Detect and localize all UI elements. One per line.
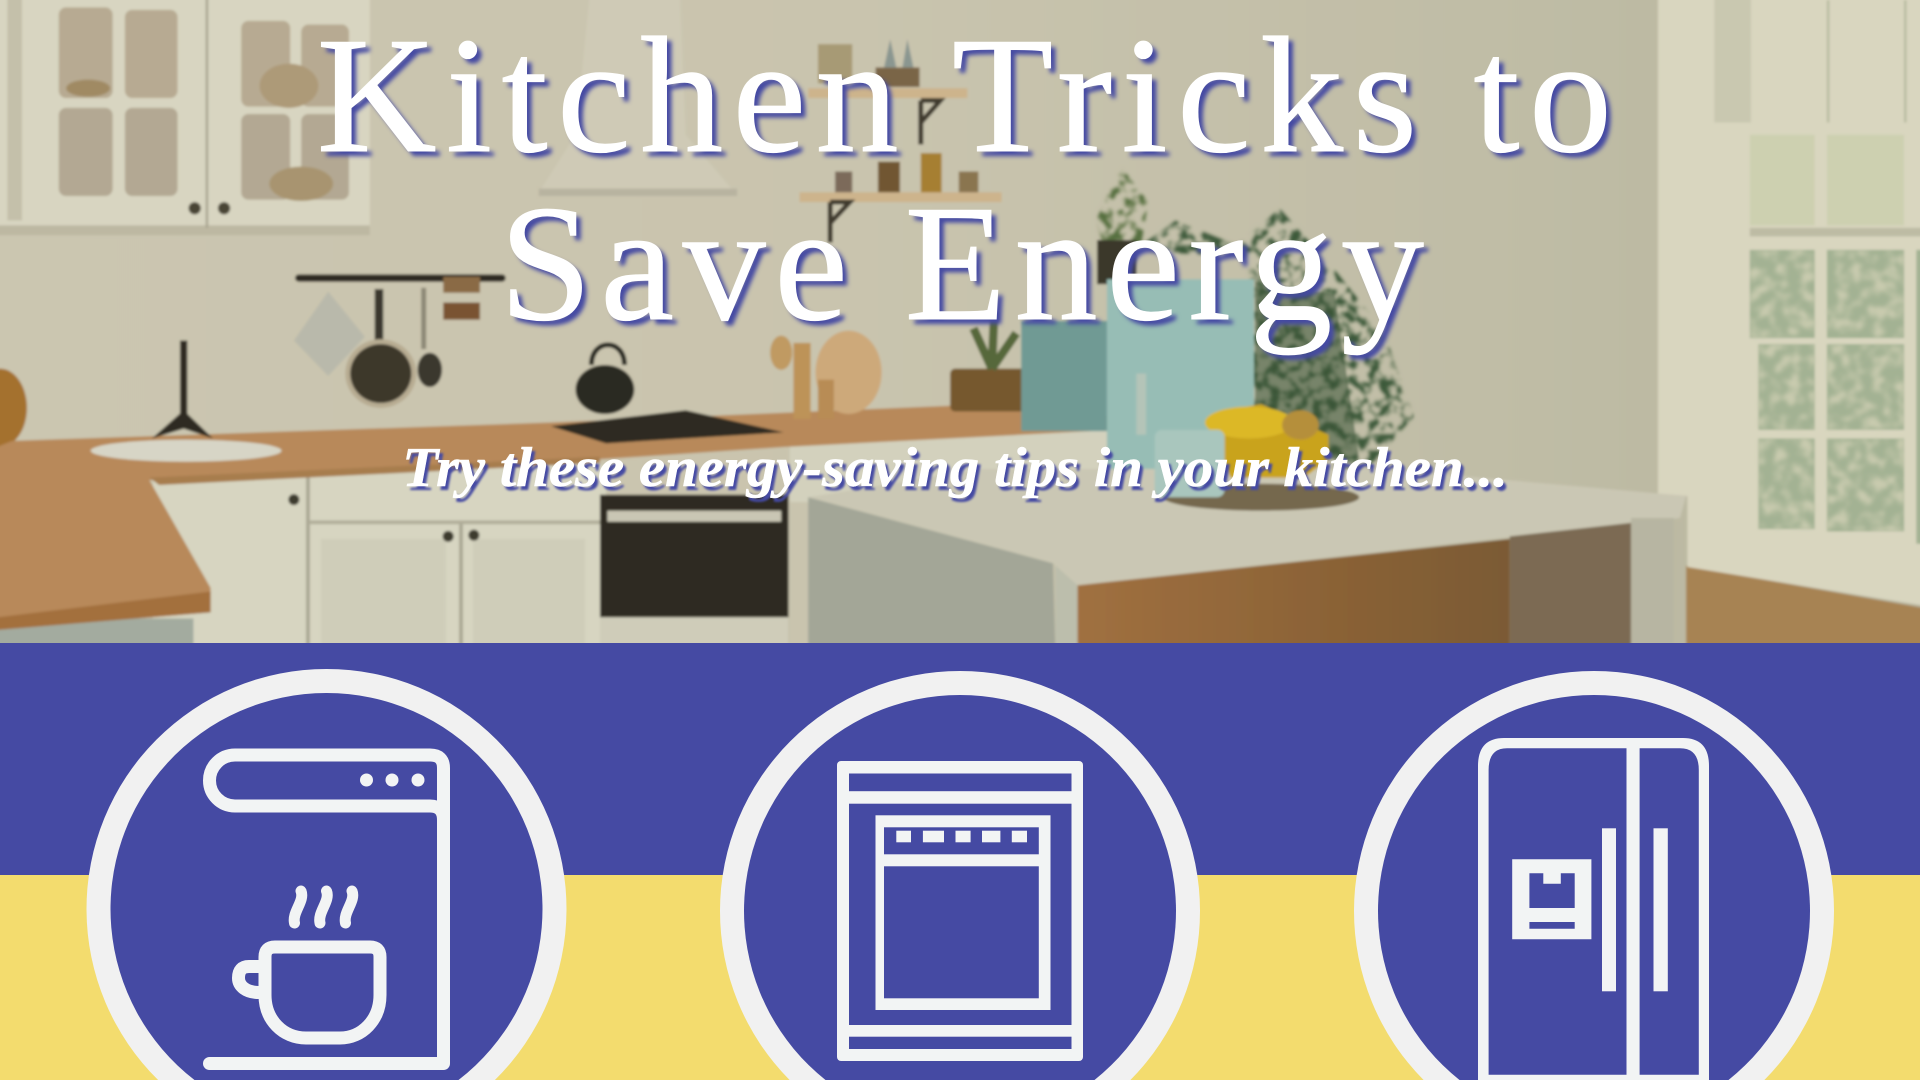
yellow band: [0, 875, 1920, 1080]
floor: [1686, 566, 1920, 655]
oven frame cut-outs: [849, 774, 1072, 1049]
refrigerator body: [1478, 738, 1709, 1080]
window and trim: [1658, 0, 1920, 607]
oven: [600, 495, 789, 655]
wicker ball: [0, 369, 27, 447]
control strip: [884, 827, 1039, 854]
coffee maker ring: [87, 669, 567, 1080]
range hood: [539, 0, 737, 196]
potted plant on counter: [950, 312, 1033, 412]
title line 1: Kitchen Tricks to: [317, 3, 1621, 187]
lower cabinets: [0, 429, 1108, 655]
door handles: [1602, 828, 1668, 991]
leafy plant: [1096, 165, 1414, 471]
shelves and jars: [800, 39, 1002, 243]
oven door: [876, 815, 1050, 1010]
icon: refrigerator: [1354, 671, 1834, 1080]
water dispenser: [1512, 859, 1591, 939]
control dots: [360, 774, 424, 786]
refrigerator disc: [1378, 695, 1810, 1080]
background photo: kitchen interior: [0, 0, 1920, 643]
coffee maker disc: [110, 693, 543, 1080]
sink and faucet: [91, 340, 282, 462]
title line 2: Save Energy: [499, 171, 1433, 355]
colour bands and appliance icons: [0, 669, 1920, 1080]
steam: [294, 891, 353, 923]
centre divider: [1626, 745, 1640, 1080]
upper cabinets: [0, 0, 370, 235]
kettle and stove: [551, 345, 784, 443]
cup handle: [238, 966, 259, 992]
refrigerator ring: [1354, 671, 1834, 1080]
trivet, mug, bananas: [1155, 404, 1359, 511]
counter tops: [0, 405, 1114, 631]
oven outer frame: [837, 761, 1083, 1061]
fridge: [1021, 279, 1254, 500]
icon: oven: [720, 671, 1200, 1080]
wooden utensils and board: [770, 331, 882, 419]
island counter: [808, 469, 1686, 655]
utensil rail, pan, pot holder: [294, 274, 506, 408]
oven disc: [744, 695, 1176, 1080]
coffee cup: [265, 947, 380, 1038]
blue band: [0, 643, 1920, 875]
door window: [884, 866, 1039, 998]
oven ring: [720, 671, 1200, 1080]
oven buttons: [896, 831, 1027, 842]
subtitle: Try these energy-saving tips in your kitchen...: [402, 437, 1507, 499]
icon: coffee maker: [87, 669, 567, 1080]
coffee maker body: [210, 755, 444, 1064]
title: [317, 3, 1621, 363]
